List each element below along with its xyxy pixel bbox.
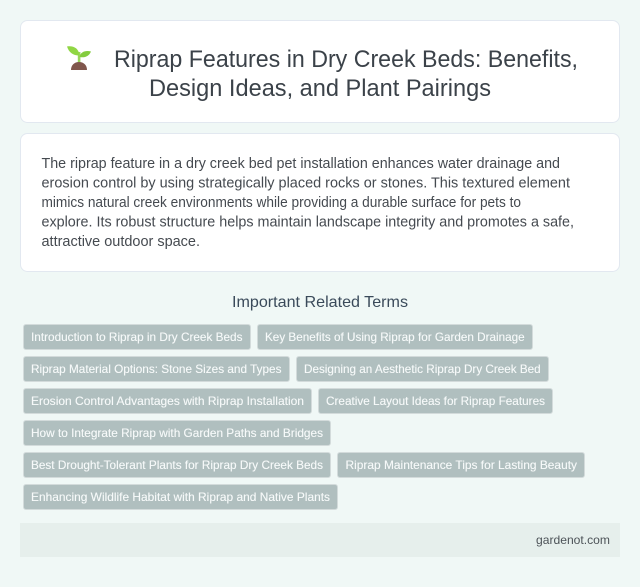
tag: Key Benefits of Using Riprap for Garden Drainage bbox=[265, 330, 525, 344]
footer bbox=[20, 523, 620, 557]
description text: explore. Its robust structure helps maintain landscape integrity and promotes a safe, bbox=[42, 214, 574, 230]
tag bbox=[24, 420, 330, 446]
tag bbox=[296, 356, 548, 382]
tag: Best Drought-Tolerant Plants for Riprap Dry Creek Beds bbox=[31, 458, 323, 472]
tag: Riprap Material Options: Stone Sizes and Types bbox=[31, 362, 282, 376]
description text: erosion control by using strategically placed rocks or stones. This textured element bbox=[42, 176, 570, 192]
tag bbox=[258, 324, 532, 350]
tag bbox=[24, 324, 250, 350]
description text: attractive outdoor space. bbox=[42, 234, 200, 250]
tag bbox=[24, 356, 290, 382]
title bbox=[114, 46, 578, 102]
title: Riprap Features in Dry Creek Beds: Benefits, bbox=[114, 46, 578, 73]
heading: important related terms: Important Related Terms bbox=[232, 294, 408, 311]
tag: Riprap Maintenance Tips for Lasting Beauty bbox=[346, 458, 577, 472]
tag list bbox=[24, 324, 584, 510]
footer source: gardenot.com bbox=[536, 533, 610, 547]
tag bbox=[24, 388, 312, 414]
panel: title card bbox=[20, 20, 620, 122]
tag bbox=[338, 452, 584, 478]
tag: Enhancing Wildlife Habitat with Riprap and Native Plants bbox=[31, 490, 330, 504]
tag: How to Integrate Riprap with Garden Paths and Bridges bbox=[31, 426, 323, 440]
tag bbox=[24, 452, 330, 478]
tag bbox=[318, 388, 552, 414]
tag: Introduction to Riprap in Dry Creek Beds bbox=[31, 330, 242, 344]
tag: Designing an Aesthetic Riprap Dry Creek Bed bbox=[304, 362, 541, 376]
panel: description bbox=[20, 134, 620, 272]
description text bbox=[42, 156, 574, 250]
title: Design Ideas, and Plant Pairings bbox=[149, 75, 491, 102]
tag: Creative Layout Ideas for Riprap Features bbox=[326, 394, 545, 408]
tag bbox=[24, 484, 338, 510]
description text: The riprap feature in a dry creek bed pet installation enhances water drainage and bbox=[42, 156, 560, 172]
description text: mimics natural creek environments while providing a durable surface for pets to bbox=[42, 195, 521, 211]
tag: Erosion Control Advantages with Riprap Installation bbox=[31, 394, 304, 408]
icon: seedling bbox=[67, 46, 91, 70]
